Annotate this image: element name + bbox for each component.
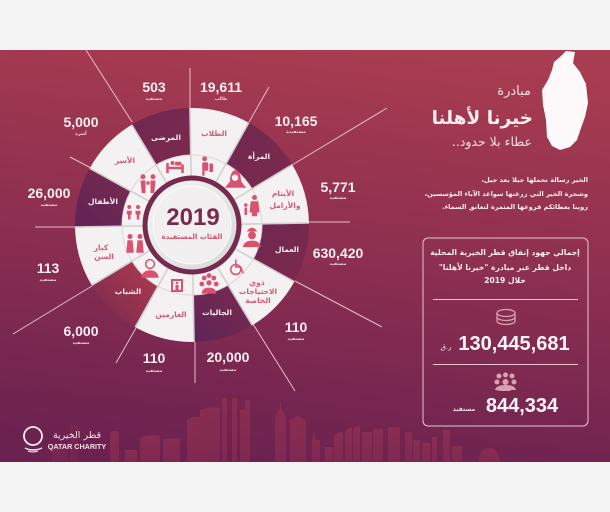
segment labels: السن xyxy=(94,252,114,261)
outer ring segments xyxy=(73,106,311,344)
value labels: مستفيدة xyxy=(286,130,306,135)
value labels: 19,611 xyxy=(200,79,242,95)
panel heading xyxy=(430,248,580,285)
summary panel xyxy=(423,238,588,426)
subtitle: initiative: مبادرة xyxy=(497,84,531,99)
value labels: 5,771 xyxy=(320,179,356,195)
value labels: مستفيد xyxy=(220,368,237,373)
segment labels: الخاصة xyxy=(245,296,271,305)
value labels: مستفيد xyxy=(41,203,58,208)
segment labels: الشباب xyxy=(115,287,141,296)
value labels: أسرة xyxy=(75,130,87,137)
icon: people xyxy=(494,372,516,391)
title block xyxy=(432,84,533,150)
segment labels: العمال xyxy=(275,245,299,254)
segment labels: والأرامل xyxy=(269,201,301,210)
value labels: مستفيد xyxy=(330,262,347,267)
segment labels xyxy=(88,129,301,319)
logo: Qatar Charity xyxy=(24,427,106,452)
icon: elderly xyxy=(126,234,144,253)
beneficiaries unit: مستفيد xyxy=(453,406,476,413)
value labels: 110 xyxy=(285,319,308,335)
icon: student xyxy=(202,156,213,176)
segment labels: الأيتام xyxy=(272,189,294,198)
total amount: 130,445,681 xyxy=(458,333,570,355)
icon: young person xyxy=(141,260,159,278)
intro paragraph xyxy=(425,176,588,211)
tagline: عطاء بلا حدود.. xyxy=(452,134,532,150)
logo English name: QATAR CHARITY xyxy=(48,442,106,451)
icon: patient xyxy=(166,161,184,173)
currency: ر.ق xyxy=(440,343,452,351)
value labels: مستفيد xyxy=(40,278,57,283)
radial leader lines xyxy=(13,50,387,391)
value labels: مستفيد xyxy=(146,369,163,374)
icon: wheelchair xyxy=(231,260,243,274)
segment labels: الجاليات xyxy=(202,308,232,317)
segment labels: الأسر xyxy=(114,156,135,165)
center disk xyxy=(142,176,242,274)
value labels xyxy=(28,79,364,374)
intro paragraph: وشجرة الخير التي زرعتها سواعد الآباء المؤسسين، xyxy=(425,189,588,198)
value labels: مستفيد xyxy=(330,196,347,201)
icon: worker xyxy=(243,228,261,247)
value labels: مستفيد xyxy=(288,337,305,342)
value labels: 503 xyxy=(142,79,166,95)
segment labels: ذوي xyxy=(249,278,265,287)
segment labels: الأطفال xyxy=(88,197,118,206)
icon: map of Qatar xyxy=(542,51,588,150)
segment labels: كبار xyxy=(93,243,109,252)
value labels: طالب xyxy=(215,97,227,102)
wheel of beneficiary categories xyxy=(73,106,311,344)
center caption: الفئات المستفيدة xyxy=(162,233,222,241)
icon: debtor xyxy=(171,279,183,292)
segment labels: الطلاب xyxy=(201,129,227,138)
logo Arabic name: قطر الخيرية xyxy=(53,430,101,441)
segment labels: المرأة xyxy=(248,151,270,161)
icon: family xyxy=(140,174,156,193)
value labels: مستفيد xyxy=(146,97,163,102)
intro paragraph: الخير رسالة نحملها جيلا بعد جيل، xyxy=(482,176,588,184)
icon: coins xyxy=(497,310,515,324)
segment labels: المرضى xyxy=(151,133,181,142)
icon: community xyxy=(199,273,219,294)
panel heading: داخل قطر عبر مبادرة "خيرنا لأهلنا" xyxy=(439,262,571,272)
skyline xyxy=(52,398,500,462)
value labels: 110 xyxy=(143,350,166,366)
value labels: 113 xyxy=(37,260,60,276)
value labels: 10,165 xyxy=(275,113,318,129)
icon: mother and child xyxy=(244,195,260,216)
panel heading: خلال 2019 xyxy=(484,276,526,285)
value labels: مستفيد xyxy=(73,341,90,346)
icon: woman xyxy=(225,170,246,188)
value labels: 630,420 xyxy=(313,245,364,261)
value labels: 6,000 xyxy=(63,323,99,339)
main title: خيرنا لأهلنا xyxy=(432,106,533,129)
value labels: 5,000 xyxy=(63,114,99,130)
icon: children xyxy=(127,205,140,220)
segment labels: الغارمين xyxy=(155,310,187,319)
panel heading: إجمالي جهود إنفاق قطر الخيرية المحلية xyxy=(430,248,580,257)
segment labels: الاحتياجات xyxy=(239,287,277,296)
center year: 2019 xyxy=(166,204,220,231)
logo mark xyxy=(24,427,42,452)
value labels: 20,000 xyxy=(207,349,250,365)
total beneficiaries: 844,334 xyxy=(486,395,559,417)
intro paragraph: روينا بعطائكم فروعها المثمرة لتعانق السماء. xyxy=(442,203,588,211)
value labels: 26,000 xyxy=(28,185,71,201)
